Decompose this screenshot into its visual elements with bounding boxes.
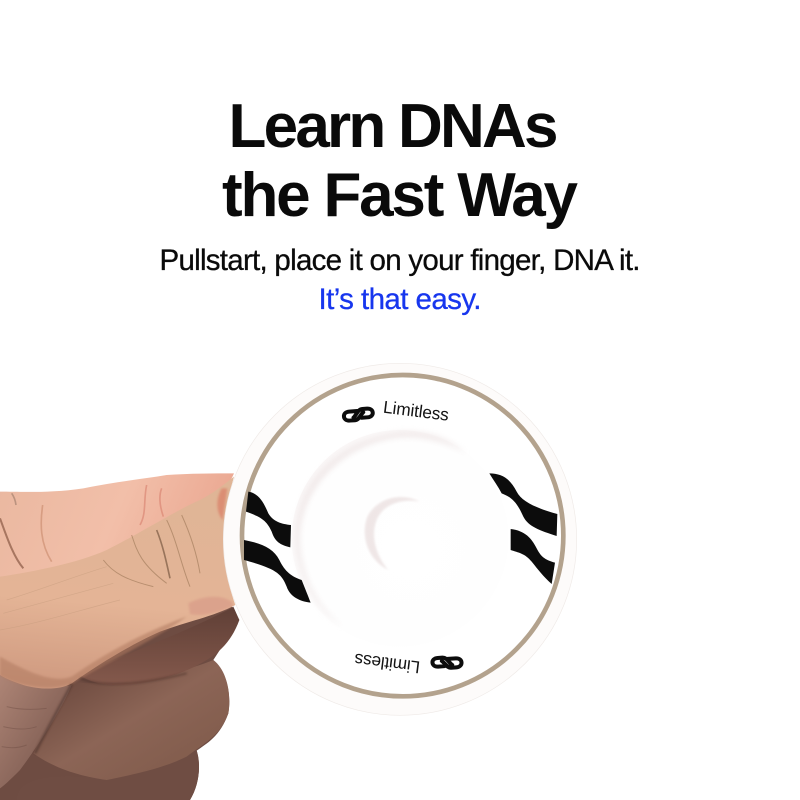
index finger — [0, 473, 234, 582]
hand silhouette base — [0, 510, 239, 800]
blue tagline: It’s that easy. — [318, 283, 482, 316]
inner surface shadow — [295, 431, 467, 627]
thumb tip redness — [217, 488, 227, 520]
top brand logo — [344, 408, 373, 421]
title: Learn DNAs — [228, 92, 558, 161]
top brand text: Limitless — [382, 397, 450, 425]
lower finger — [17, 751, 199, 800]
palm lines — [2, 707, 47, 748]
ring finger — [33, 660, 229, 780]
subtitle: Pullstart, place it on your finger, DNA it. — [160, 244, 640, 277]
thumb — [0, 477, 235, 689]
palm — [0, 673, 72, 788]
outer rim — [223, 363, 577, 715]
finger creases — [0, 485, 163, 568]
bottom brand logo — [432, 656, 462, 669]
hand holding the disc — [0, 473, 239, 800]
inner raised surface — [292, 430, 508, 647]
thumb lower shading — [0, 617, 187, 688]
tan ring — [242, 375, 563, 696]
disc — [223, 363, 577, 715]
finger separation shadow — [35, 684, 72, 753]
title: the Fast Way — [222, 161, 579, 230]
bottom brand text: Limitless — [353, 650, 421, 678]
thumb skin lines — [0, 567, 120, 630]
centre dome shadow — [365, 497, 420, 570]
left stripes — [244, 492, 311, 603]
middle finger — [82, 607, 239, 685]
title — [222, 92, 579, 230]
thumb knuckle wrinkles — [103, 515, 200, 587]
right stripes — [489, 473, 557, 584]
